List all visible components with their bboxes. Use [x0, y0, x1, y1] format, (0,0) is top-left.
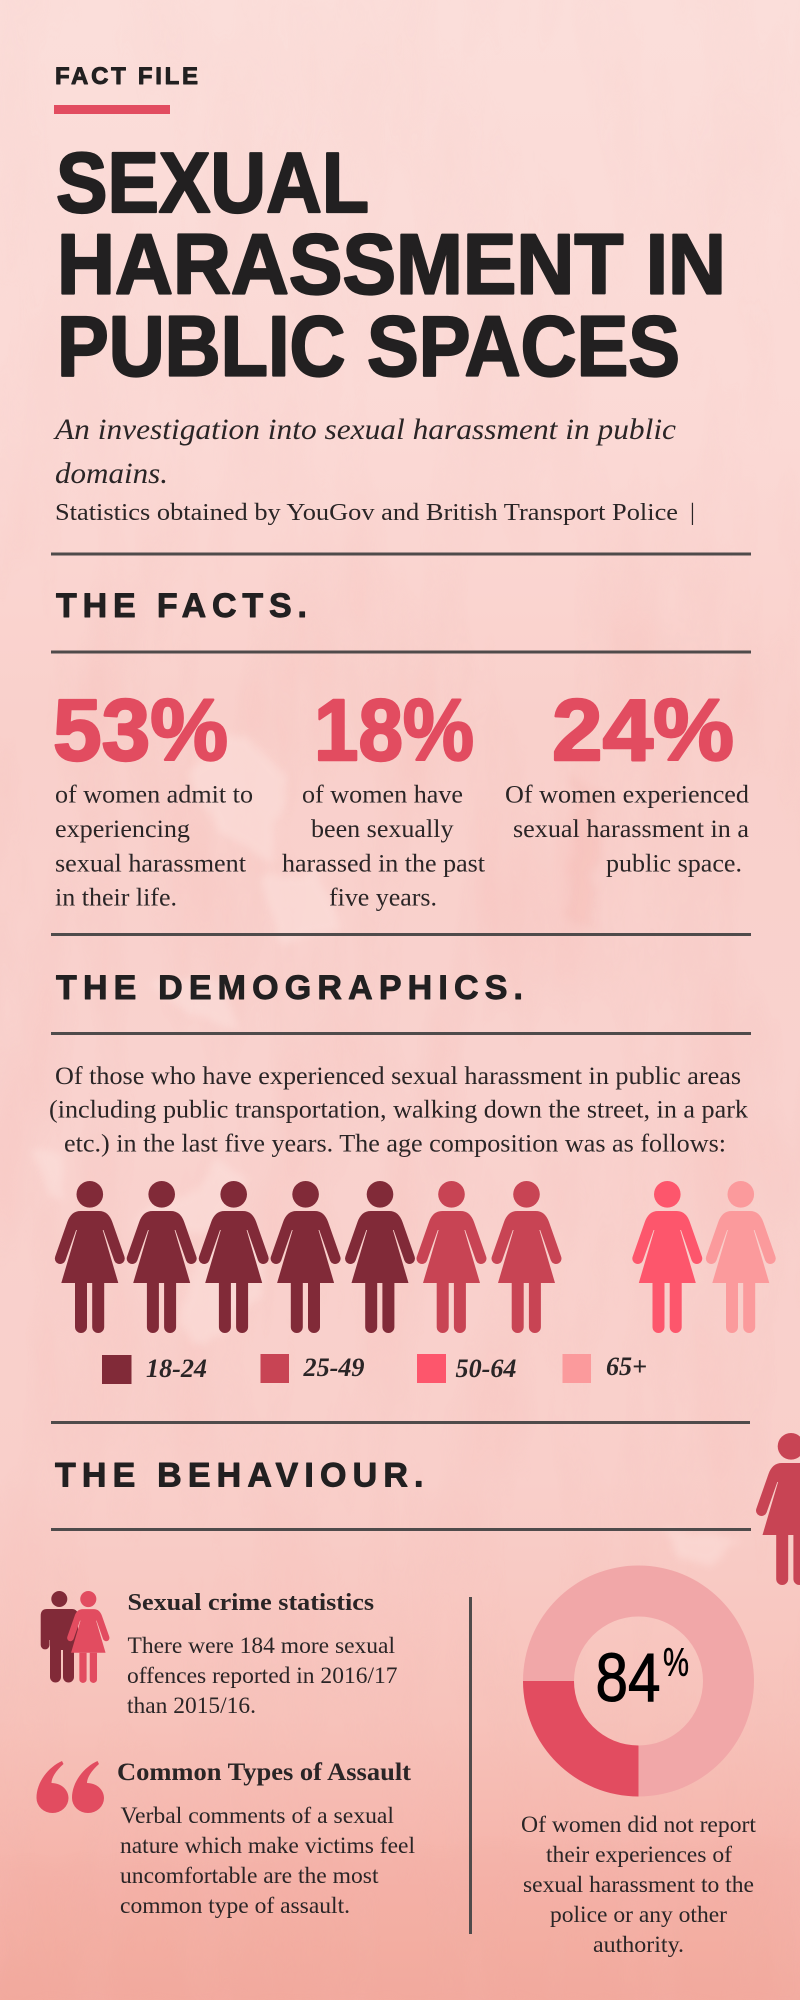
- stat: 18%: five years.: [329, 882, 437, 912]
- legend: 18-24: [146, 1354, 207, 1383]
- legend: 65+: [606, 1352, 647, 1381]
- panel: common types of assault: nature which make victims feel: [120, 1833, 415, 1859]
- chart: 84% donut: [523, 1566, 754, 1796]
- title: HARASSMENT IN: [57, 218, 726, 312]
- panel: sexual crime statistics: [41, 1590, 398, 1719]
- subtitle: An investigation into sexual harassment in public: [53, 413, 676, 446]
- title: SEXUAL: [56, 136, 369, 231]
- text block: donut caption: their experiences of: [546, 1842, 732, 1868]
- eyebrow: fact file: FACT FILE: [55, 63, 198, 90]
- stat: 18%: harassed in the past: [282, 848, 485, 878]
- stat: 18%: of women have: [302, 780, 463, 808]
- subtitle: [53, 413, 695, 526]
- stat: 53%: sexual harassment: [55, 848, 246, 878]
- stat: 18%: been sexually: [311, 814, 454, 843]
- donut value: %: [663, 1641, 689, 1685]
- text block: demographics intro: etc.) in the last five years. The age composition was as follows:: [64, 1130, 726, 1158]
- heading: the demographics: THE DEMOGRAPHICS.: [56, 969, 523, 1007]
- stat: 53%: in their life.: [55, 882, 177, 912]
- icon: cropped figure at right edge: [756, 1433, 800, 1585]
- panel: sexual crime statistics: There were 184 more sexual: [128, 1633, 395, 1659]
- legend: 50-64: [456, 1354, 516, 1383]
- stat: 18%: [282, 682, 485, 912]
- title: PUBLIC SPACES: [57, 300, 680, 394]
- text block: donut caption: sexual harassment to the: [523, 1872, 754, 1898]
- panel: common types of assault: Common Types of Assault: [117, 1757, 412, 1786]
- subtitle: domains.: [55, 457, 168, 490]
- text block: demographics intro: Of those who have experienced sexual harassment in public areas: [55, 1063, 741, 1090]
- legend: [102, 1352, 647, 1384]
- stat: 24%: sexual harassment in a: [513, 814, 749, 843]
- stat: 24%: [505, 682, 749, 878]
- panel: common types of assault: uncomfortable are the most: [120, 1863, 379, 1889]
- text block: donut caption: authority.: [593, 1932, 684, 1958]
- panel: sexual crime statistics: Sexual crime statistics: [128, 1590, 374, 1616]
- panel: sexual crime statistics: offences reported in 2016/17: [127, 1663, 398, 1689]
- stat: 53%: [53, 682, 253, 912]
- text block: donut caption: Of women did not report: [521, 1812, 756, 1838]
- text block: donut caption: police or any other: [550, 1902, 727, 1928]
- subtitle: Statistics obtained by YouGov and British Transport Police: [55, 499, 678, 526]
- text block: demographics intro: (including public transportation, walking down the street, in a park: [49, 1096, 749, 1124]
- heading: the behaviour: THE BEHAVIOUR.: [55, 1456, 424, 1494]
- stat: 24%: 24%: [552, 682, 734, 779]
- chart: age composition pictogram: [55, 1181, 776, 1333]
- stat: 24%: public space.: [606, 848, 742, 878]
- legend: 25-49: [302, 1353, 364, 1382]
- heading: the facts: THE FACTS.: [56, 587, 307, 625]
- panel: common types of assault: Verbal comments of a sexual: [120, 1803, 394, 1829]
- stat: 53%: 53%: [53, 682, 228, 779]
- accent bar: [54, 105, 170, 114]
- subtitle: |: [690, 499, 695, 526]
- stat: 53%: experiencing: [55, 814, 190, 843]
- panel: sexual crime statistics: than 2015/16.: [127, 1693, 256, 1719]
- title: [56, 136, 726, 394]
- panel: common types of assault: [36, 1757, 415, 1919]
- stat: 18%: 18%: [314, 682, 474, 779]
- eyebrow: fact file: [54, 63, 198, 114]
- panel: the facts statistics: [53, 682, 749, 912]
- panel: common types of assault: common type of assault.: [120, 1893, 350, 1919]
- icon: quotation mark: [36, 1761, 104, 1813]
- donut value: 84: [596, 1639, 660, 1716]
- stat: 53%: of women admit to: [55, 780, 253, 808]
- stat: 24%: Of women experienced: [505, 780, 749, 808]
- icon: couple: [41, 1591, 109, 1683]
